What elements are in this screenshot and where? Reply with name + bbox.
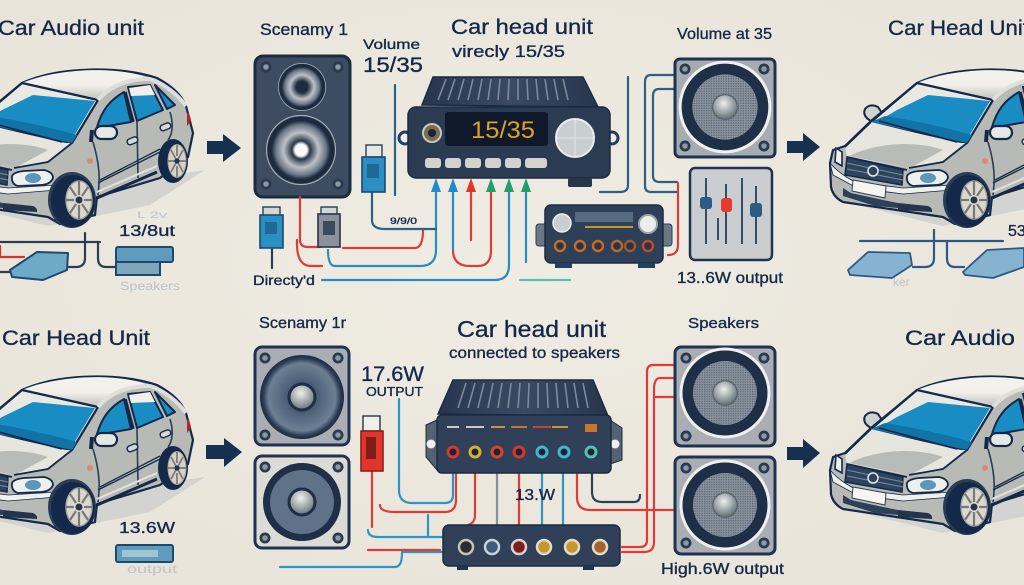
heading: Car Head Unit right: Car Head Unit xyxy=(888,17,1024,40)
faint label: 12v: L 2v xyxy=(137,210,168,220)
connector: red xyxy=(361,416,383,471)
connector: blue lower xyxy=(260,207,283,248)
speaker: bottom-right upper xyxy=(675,347,775,446)
label: 17.6W: 17.6W xyxy=(361,363,424,386)
small amplifier: top xyxy=(536,205,672,268)
small devices under top-right car xyxy=(848,230,1024,278)
heading: Car Audio unit: Car Audio unit xyxy=(0,17,144,40)
label: 13.W: 13.W xyxy=(515,487,556,504)
subheading: connected to speakers: connected to speakers xyxy=(449,345,620,362)
label: Directy'd: Directy'd xyxy=(253,272,315,288)
small devices under top-left car xyxy=(0,233,173,280)
heading: Scenamy 1r: Scenamy 1r xyxy=(259,315,347,332)
subheading: virecly 15/35: virecly 15/35 xyxy=(452,42,565,61)
heading: Car head unit top: Car head unit xyxy=(451,16,593,39)
connector: grey xyxy=(318,207,340,247)
speaker: bottom-left upper xyxy=(255,347,349,445)
head unit: top xyxy=(399,77,618,187)
arrow: bottom right xyxy=(787,439,820,468)
label: 15/35: 15/35 xyxy=(363,54,423,77)
faint label: ker: ker xyxy=(893,275,910,289)
speaker: bottom-right lower xyxy=(675,457,775,554)
panel: top-right car xyxy=(830,70,1024,228)
speaker: top right xyxy=(675,59,775,157)
label: Volume at 35: Volume at 35 xyxy=(677,26,772,43)
panel: bottom-right car xyxy=(830,377,1024,535)
arrow: top-left xyxy=(207,134,241,162)
heading: Car head unit bottom: Car head unit xyxy=(457,316,607,342)
label: High 6W output: High.6W output xyxy=(661,561,785,578)
label: 13.6W: 13.6W xyxy=(119,520,176,537)
heading: Scenamy 1: Scenamy 1 xyxy=(260,20,348,39)
panel: top-left car xyxy=(0,70,205,228)
label: OUTPUT: OUTPUT xyxy=(366,384,423,399)
faint label: speakers: Speakers xyxy=(120,279,180,293)
wires: bottom centre xyxy=(280,365,675,567)
arrow: bottom left xyxy=(206,438,242,467)
small amplifier: bottom xyxy=(443,525,620,570)
panel: bottom-left car xyxy=(0,377,205,535)
head unit: bottom xyxy=(426,380,622,473)
speaker cabinet: top xyxy=(255,56,350,197)
heading: Car Head Unit bottom left: Car Head Unit xyxy=(2,327,150,350)
equalizer panel xyxy=(690,168,772,260)
display value: 15/35 xyxy=(471,117,535,144)
label: Volume: Volume xyxy=(363,36,420,52)
wires: top centre left xyxy=(272,85,570,280)
label: Speakers: Speakers xyxy=(688,315,759,332)
arrow: top right xyxy=(787,133,820,161)
heading: Car Audio: Car Audio xyxy=(905,327,1015,350)
speaker: bottom-left lower xyxy=(255,456,349,548)
label: 13/8ut: 13/8ut xyxy=(119,223,176,240)
connector: blue top xyxy=(362,145,385,192)
wires: top centre right xyxy=(600,75,678,255)
device: bottom-left xyxy=(116,545,173,562)
faint label: output: output xyxy=(127,562,178,576)
small label: 9/9/0: 9/9/0 xyxy=(390,216,417,226)
up arrows into head unit xyxy=(431,178,531,192)
label: 13.6W output: 13..6W output xyxy=(677,270,784,287)
